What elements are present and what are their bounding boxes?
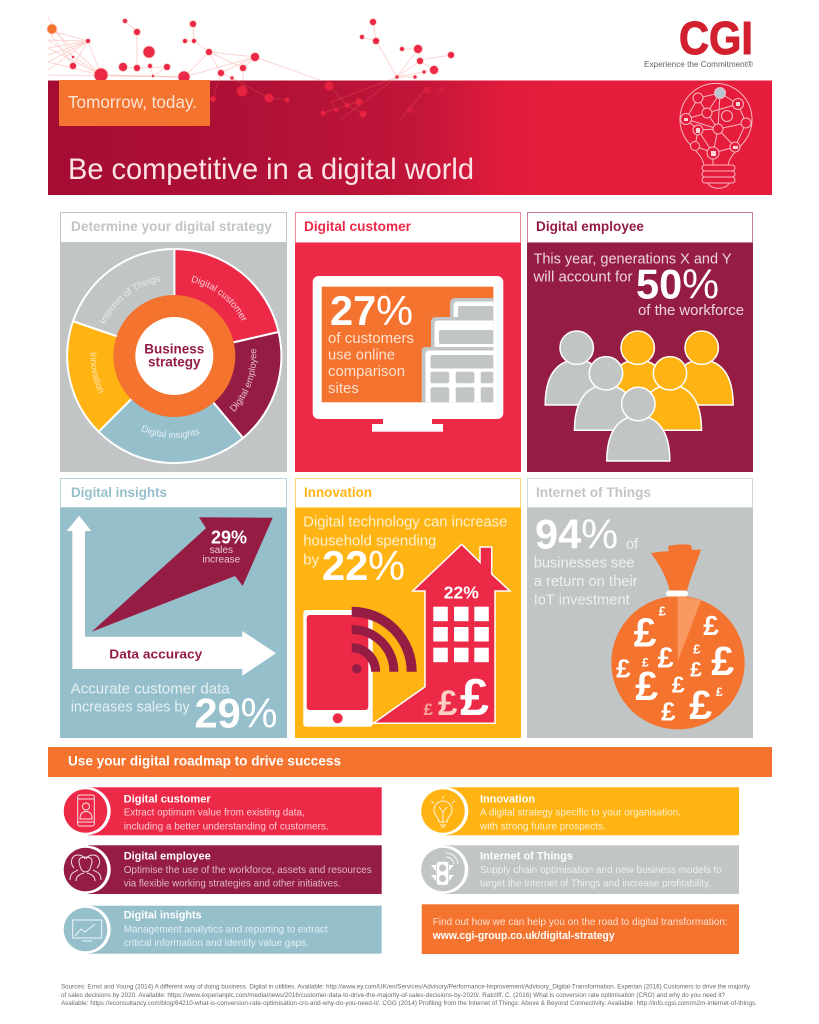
icon: chart monitor	[73, 920, 102, 941]
roadmap: innovation: A digital strategy specific to your organisation,	[480, 808, 681, 819]
roadmap banner	[48, 747, 772, 777]
icon: house: £	[460, 669, 489, 727]
stat: 22%: 22%	[322, 542, 405, 589]
stat: 50%: 50%	[636, 260, 719, 307]
heading: internet of things: Internet of Things	[536, 485, 651, 500]
text: customers comparison: use online	[328, 346, 395, 364]
text: IoT return: businesses see	[534, 554, 635, 571]
icon: money bag: £	[703, 610, 719, 641]
roadmap: innovation: Innovation	[480, 793, 535, 805]
roadmap: digital employee	[63, 845, 382, 894]
roadmap: digital insights: Digital insights	[124, 909, 202, 921]
roadmap: internet of things: Internet of Things	[480, 850, 573, 862]
wheel chart: strategy	[148, 354, 201, 370]
roadmap banner: Use your digital roadmap to drive success	[68, 754, 341, 769]
icon: money bag: £	[658, 642, 674, 674]
growth arrow: increase	[202, 555, 241, 566]
icon: money bag: £	[711, 638, 734, 684]
wheel chart: Internet of Things	[100, 276, 160, 324]
icon: tablet with wifi	[303, 610, 412, 727]
text: customers comparison: sites	[328, 380, 359, 397]
sources footnote: of sales decisions by 2020. Available: https://www.experianplc.com/media/news/2016/customer-data-to-drive-the-majority-of-sales-decisions-by-2020/. Ratcliff, C. (2016) What is conversion rate optimisation (CRO) and why do you need it?	[61, 993, 726, 999]
roadmap: digital customer: including a better understanding of customers.	[124, 822, 329, 833]
roadmap: digital customer: Digital customer	[124, 793, 211, 805]
roadmap: innovation	[420, 787, 739, 835]
call to action	[422, 904, 739, 954]
roadmap: digital employee: via flexible working strategies and other initiatives.	[124, 879, 341, 890]
text: accurate data: Accurate customer data	[71, 680, 230, 697]
tagline box	[59, 80, 210, 126]
icon: network light bulb	[680, 83, 752, 188]
text: generations	[533, 250, 744, 319]
wheel chart: Digital insights	[141, 425, 200, 440]
heading: determine strategy: Determine your digital strategy	[71, 219, 272, 234]
text: customers comparison	[328, 330, 414, 397]
roadmap: digital customer: Extract optimum value from existing data,	[124, 808, 305, 819]
roadmap: digital insights: Management analytics and reporting to extract	[124, 924, 328, 935]
wheel chart: Business	[144, 342, 204, 356]
text: generations: of the workforce	[638, 302, 744, 319]
panel: digital insights	[60, 478, 287, 738]
header band	[48, 80, 772, 195]
text: IoT return: of	[626, 536, 639, 553]
roadmap: innovation: with strong future prospects.	[479, 822, 606, 833]
icon: money bag	[611, 544, 745, 729]
roadmap: internet of things: target the Internet of Things and increase profitability.	[480, 879, 711, 890]
icon: money bag: £	[661, 697, 676, 727]
panel: digital customer	[295, 212, 521, 472]
icon: money bag: £	[616, 653, 631, 683]
panel: innovation	[295, 478, 521, 738]
text: customers comparison: of customers	[328, 330, 414, 347]
wheel chart: Digital customer	[192, 276, 246, 320]
network graphic	[47, 17, 454, 120]
roadmap: digital insights	[63, 906, 382, 954]
icon: money bag: £	[689, 682, 712, 728]
panel: determine your digital strategy	[60, 212, 287, 472]
icon: monitor	[313, 276, 503, 432]
text: accurate data	[71, 680, 230, 716]
text: household spending	[303, 514, 507, 568]
text: IoT return	[534, 536, 639, 608]
wheel chart	[66, 248, 282, 464]
icon: money bag: £	[716, 685, 723, 699]
icon: money bag: £	[659, 603, 667, 618]
chart axes arrows	[67, 516, 276, 676]
CGI logo: Experience the Commitment®	[644, 60, 753, 69]
text: generations: will account for	[533, 269, 632, 286]
text: accurate data: increases sales by	[71, 699, 190, 716]
text: IoT return: a return on their	[534, 573, 638, 590]
panel: digital employee	[527, 212, 753, 472]
icon: people	[545, 331, 733, 461]
icon: money bag: £	[693, 641, 701, 656]
wheel chart: Digital employee	[230, 349, 258, 412]
roadmap: digital employee: Digital employee	[124, 850, 211, 862]
sources footnote: Available: https://econsultancy.com/blog/64210-what-is-conversion-rate-optimisation-cro-and-why-do-you-need-it/. CGG (2014) Profiling from the Internet of Things: Above & Beyond Connectivity. Available: http://info.cgsi.com/m2m-internet-of-things.	[61, 1001, 757, 1007]
icon: team	[70, 855, 101, 881]
icon: money bag: £	[642, 655, 649, 669]
roadmap: internet of things: Supply chain optimisation and new business models to	[480, 865, 722, 876]
growth arrow	[92, 517, 273, 632]
call to action: www.cgi-group.co.uk/digital-strategy	[432, 930, 616, 942]
icon: money bag: £	[634, 610, 657, 656]
text: household spending: household spending	[303, 533, 436, 550]
text: customers comparison: comparison	[328, 363, 405, 380]
stat: 94%: 94%	[535, 510, 618, 557]
panel: internet of things	[527, 478, 753, 738]
icon: house: 22%	[444, 582, 479, 602]
sources footnote: Sources: Ernst and Young (2014) A different way of doing business. Digital in utilities. Available: http://www.ey.com/UK/en/Services/Advisory/Performance-Improvement/Advisory_Digital-Transformation. Experian (2016) Customers to drive the majority	[61, 985, 750, 991]
growth arrow: 29%	[211, 527, 247, 547]
roadmap: digital insights: critical information and identify value gaps.	[124, 938, 309, 949]
stat: 29%: 29%	[194, 689, 278, 736]
text: household spending: Digital technology can increase	[303, 514, 507, 531]
icon: phone	[78, 795, 94, 826]
roadmap: digital customer	[63, 787, 382, 835]
roadmap: digital employee: Optimise the use of the workforce, assets and resources	[124, 865, 372, 876]
heading: digital employee: Digital employee	[536, 219, 644, 234]
axis label: Data accuracy	[109, 646, 203, 661]
text: household spending: by	[303, 551, 320, 568]
icon: house: £	[438, 684, 458, 723]
CGI logo: CGI	[679, 12, 753, 64]
CGI logo	[644, 12, 753, 69]
icon: house	[373, 544, 510, 727]
heading: digital customer: Digital customer	[304, 219, 412, 234]
main title: Be competitive in a digital world	[68, 153, 474, 186]
roadmap: internet of things	[420, 845, 739, 894]
tagline box: Tomorrow, today.	[68, 92, 197, 112]
icon: money bag: £	[635, 663, 658, 709]
icon: money bag: £	[690, 659, 702, 682]
icon: light bulb	[431, 796, 455, 827]
icon: money bag: £	[672, 672, 685, 698]
icon: house: £	[424, 700, 434, 719]
stat: 27%: 27%	[330, 287, 413, 334]
growth arrow: sales	[210, 545, 233, 556]
text: IoT return: IoT investment	[534, 591, 631, 608]
call to action: Find out how we can help you on the road to digital transformation:	[433, 917, 728, 928]
icon: traffic light	[431, 853, 458, 885]
text: generations: This year, generations X and Y	[534, 250, 732, 267]
heading: innovation: Innovation	[304, 485, 372, 500]
heading: digital insights: Digital insights	[71, 485, 167, 500]
sources footnote	[61, 985, 757, 1007]
wheel chart: Innovation	[90, 352, 104, 394]
